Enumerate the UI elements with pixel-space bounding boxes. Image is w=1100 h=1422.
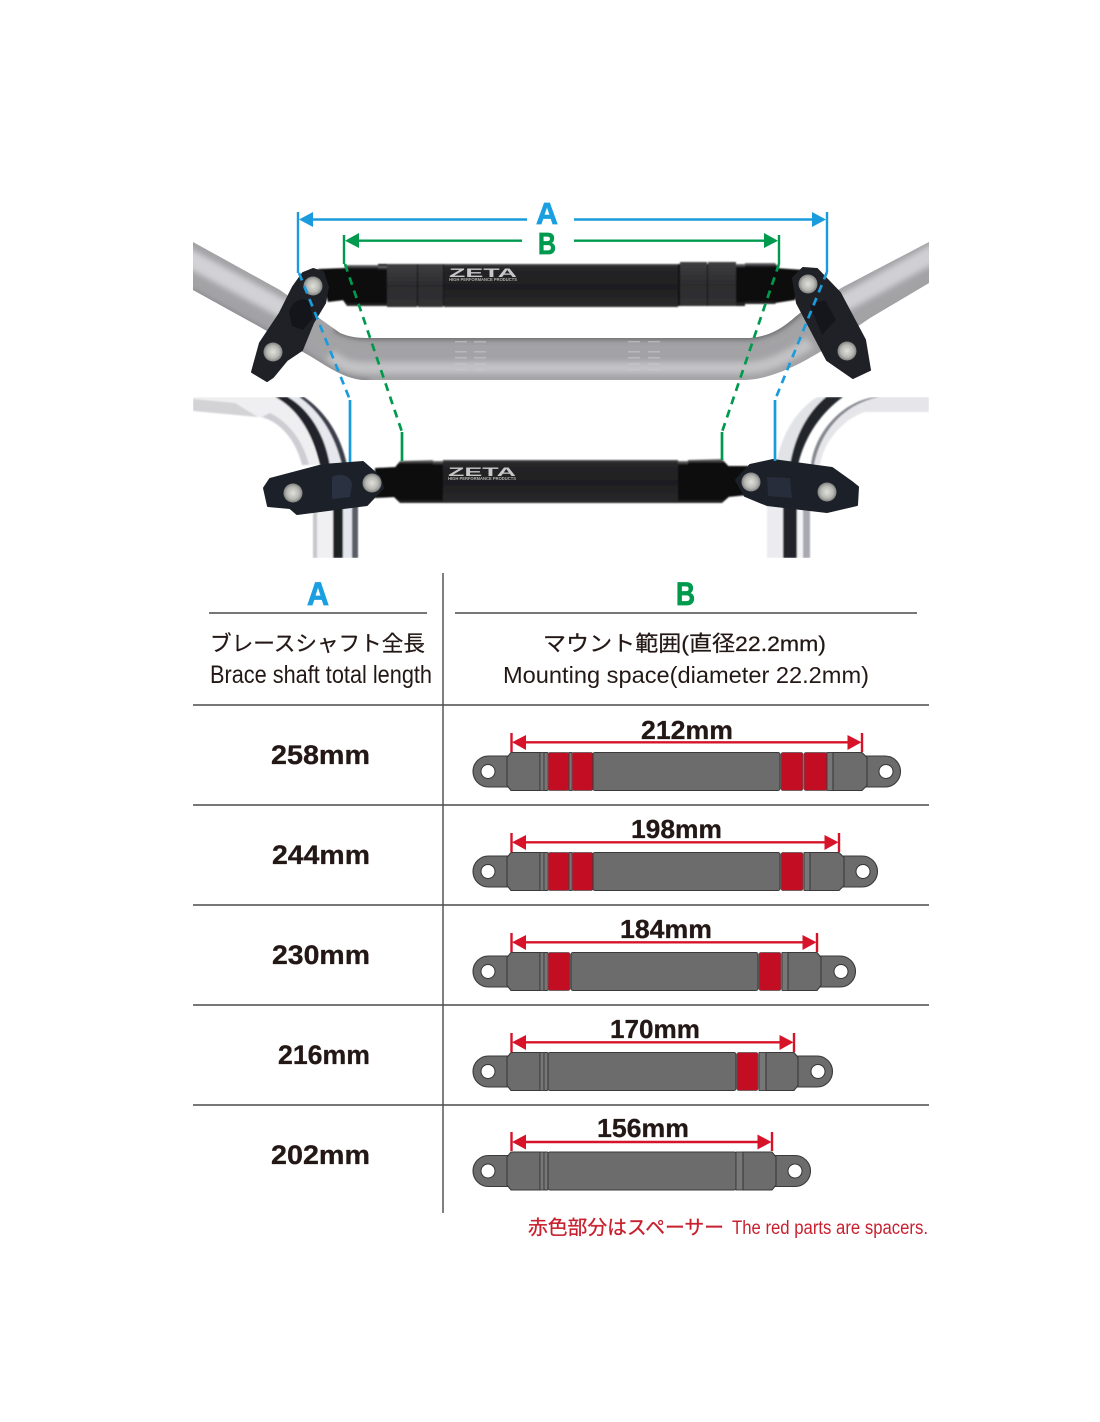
right clamp upper xyxy=(793,268,870,378)
blue guide lines xyxy=(299,272,827,462)
rod diagram 198mm: 198mm xyxy=(631,814,722,844)
rod diagram 156mm: 156mm xyxy=(597,1113,689,1143)
rod diagram 198mm xyxy=(473,814,877,890)
dimension B arrow xyxy=(344,226,779,264)
column header A: ブレースシャフト全長 xyxy=(210,632,425,656)
chrome handlebar right xyxy=(767,397,929,558)
row values: 244mm xyxy=(272,840,370,870)
knurl marks xyxy=(455,341,660,370)
footnote: 赤色部分はスペーサー xyxy=(528,1217,724,1239)
brand mark on long shaft xyxy=(449,266,518,282)
photo: chrome handlebar with short brace xyxy=(193,397,929,558)
photo: handlebar with long brace xyxy=(185,240,940,384)
column header A xyxy=(210,576,432,689)
column header A: A xyxy=(307,576,329,612)
brand mark on long shaft: ZETA xyxy=(449,266,518,280)
left clamp lower xyxy=(264,462,383,514)
row values: 202mm xyxy=(271,1140,370,1170)
brace shaft long xyxy=(318,262,805,307)
column header B: B xyxy=(676,576,695,612)
rod diagram 212mm: 212mm xyxy=(641,715,733,745)
brace shaft short xyxy=(375,459,748,503)
rod diagram 184mm: 184mm xyxy=(620,914,712,944)
row values: 258mm xyxy=(271,740,370,770)
table grid xyxy=(193,573,929,1213)
row values: 216mm xyxy=(278,1040,370,1070)
rod diagram 212mm xyxy=(473,715,900,790)
dimension A arrow xyxy=(298,196,827,273)
brand mark on long shaft: HIGH PERFORMANCE PRODUCTS xyxy=(449,277,517,282)
brand mark on short shaft: ZETA xyxy=(448,465,517,479)
right clamp lower xyxy=(736,460,858,512)
footnote: The red parts are spacers. xyxy=(732,1218,928,1239)
rod diagram 170mm: 170mm xyxy=(610,1014,700,1044)
column header B: マウント範囲(直径22.2mm) xyxy=(543,632,826,656)
rod diagram 184mm xyxy=(473,914,855,990)
row values: 230mm xyxy=(272,940,370,970)
brand mark on short shaft: HIGH PERFORMANCE PRODUCTS xyxy=(448,476,516,481)
rod diagram 156mm xyxy=(473,1113,810,1190)
column header A: Brace shaft total length xyxy=(210,661,432,689)
label B: B xyxy=(538,226,556,261)
chrome handlebar left xyxy=(193,397,358,558)
green guide lines xyxy=(345,264,779,461)
handlebar tube xyxy=(185,240,940,384)
column header B xyxy=(503,576,869,688)
brand mark on short shaft xyxy=(448,465,517,481)
column header B: Mounting space(diameter 22.2mm) xyxy=(503,662,869,688)
footnote xyxy=(528,1217,928,1239)
rod diagram 170mm xyxy=(473,1014,832,1090)
row values xyxy=(271,740,370,1170)
label A: A xyxy=(536,196,558,231)
left clamp upper xyxy=(252,269,328,381)
